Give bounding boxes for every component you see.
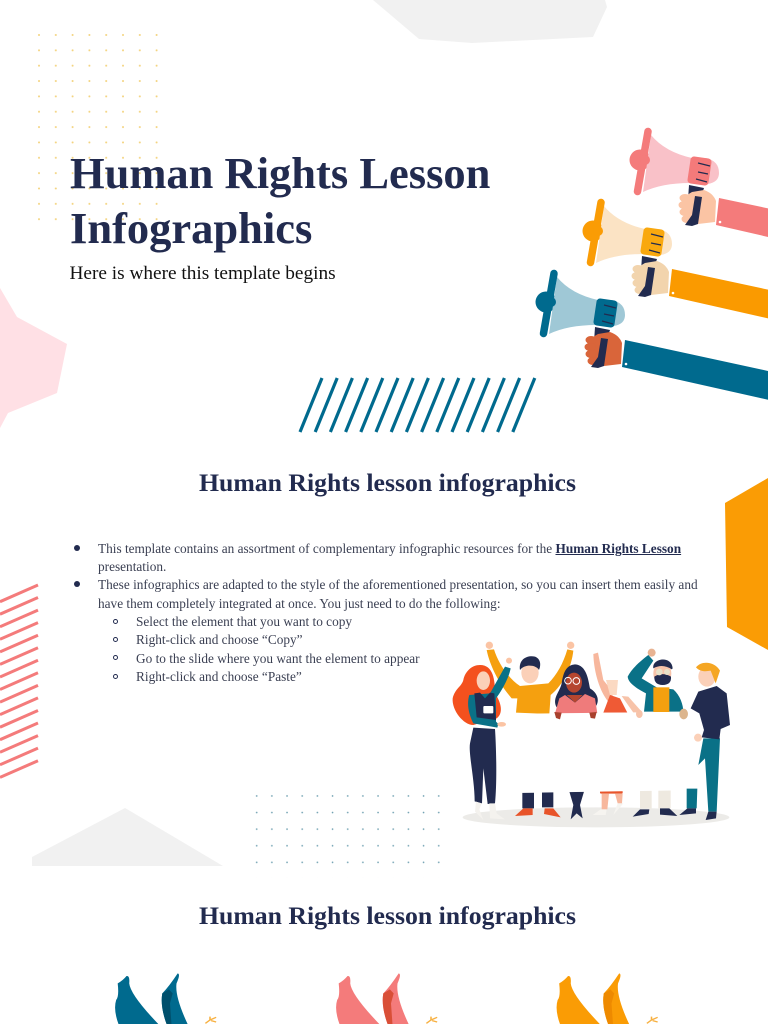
bottom wing icon: pink: [336, 973, 437, 1024]
grey shape: top: [373, 0, 607, 43]
sub-bullet 2 text: Right-click and choose “Copy”: [136, 632, 303, 647]
sub-bullet 3 text: Go to the slide where you want the element to appear: [136, 651, 420, 666]
illustration: people holding a banner: [453, 642, 730, 827]
subtitle: Here is where this template begins: [70, 263, 336, 284]
bottom wing icon: teal: [115, 973, 216, 1024]
teal diagonal stripes: [300, 378, 535, 432]
pink star shape: [0, 288, 67, 428]
bullet 1 text: This template contains an assortment of complementary infographic resources for the Human Rights Lesson: [98, 541, 681, 556]
banner: [493, 712, 702, 793]
bullet 2 text: These infographics are adapted to the style of the aforementioned presentation, so you can insert them easily and: [98, 577, 698, 592]
teal dot grid: [255, 794, 445, 878]
sub-bullet 4 text: Right-click and choose “Paste”: [136, 669, 302, 684]
bullet 1 text: [98, 541, 682, 574]
sub-bullet 2: [113, 637, 118, 642]
sub-bullet 1: [113, 619, 118, 624]
title: Human Rights Lesson: [70, 148, 490, 198]
person: waving person in red top: [593, 653, 642, 815]
bullet 2 text: have them completely integrated at once. You just need to do the following:: [98, 596, 501, 611]
megaphone and arm: teal: [536, 274, 768, 406]
yellow dot grid: [37, 33, 159, 223]
person: woman with red hair: [453, 658, 512, 820]
orange hexagon shape: [725, 478, 768, 650]
instructions text block: [74, 541, 698, 684]
bullet 2 text: [98, 577, 698, 611]
title: [70, 148, 490, 253]
bottom wing icon: orange: [557, 973, 658, 1024]
hands holding the banner: [636, 709, 688, 719]
sub-bullet 4: [113, 674, 118, 679]
grey triangle shape: [32, 808, 223, 866]
person: man with orange hair: [679, 663, 730, 820]
bullet 2: [74, 581, 80, 587]
megaphone and arm: pink: [630, 132, 768, 242]
title: Infographics: [70, 203, 312, 253]
section heading 1: Human Rights lesson infographics: [199, 468, 576, 497]
person: man in orange sweater: [486, 642, 574, 817]
pink diagonal stripes: [0, 585, 38, 777]
person: bearded man in teal jacket: [628, 649, 683, 817]
sub-bullet 3: [113, 655, 118, 660]
bullet 1: [74, 545, 80, 551]
megaphone and arm: orange: [582, 202, 768, 324]
person: woman with glasses: [555, 664, 598, 819]
bullet 1 text: presentation.: [98, 559, 166, 574]
section heading 2: Human Rights lesson infographics: [199, 901, 576, 930]
sub-bullet 1 text: Select the element that you want to copy: [136, 614, 352, 629]
hands of woman with glasses: [554, 712, 597, 719]
